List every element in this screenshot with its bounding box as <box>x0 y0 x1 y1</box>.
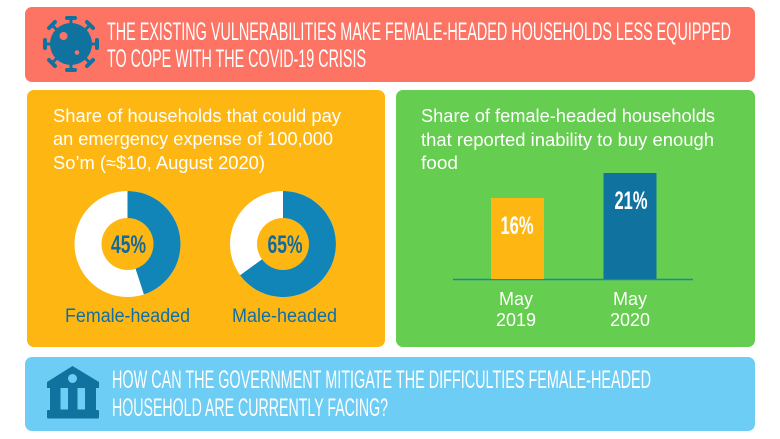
panel text <box>421 106 715 173</box>
panel text: Share of female-headed households <box>421 106 715 126</box>
panel: emergency expense <box>27 90 385 347</box>
axis label: May 2020: May <box>613 289 647 309</box>
axis label: May 2019: May <box>499 289 533 309</box>
bar chart <box>453 173 693 330</box>
label: male-headed: Male-headed <box>232 306 337 327</box>
label: female-headed: Female-headed <box>65 306 190 327</box>
panel text: Share of households that could pay <box>53 106 341 126</box>
footer banner <box>25 357 755 431</box>
footer text: HOUSEHOLD ARE CURRENTLY FACING? <box>112 394 388 422</box>
axis label: May 2019 <box>496 289 536 330</box>
donut: male-headed 65% <box>230 191 336 297</box>
panel text: So’m (≈$10, August 2020) <box>53 153 265 173</box>
axis label: May 2020 <box>610 289 650 330</box>
header text <box>107 18 731 73</box>
bar: May 2020: 21% <box>614 187 648 215</box>
panel text <box>53 106 341 173</box>
bar: May 2020 <box>604 173 656 279</box>
panel text: an emergency expense of 100,000 <box>53 129 333 149</box>
icon: government building <box>47 366 99 418</box>
footer text <box>112 366 651 422</box>
bar: May 2019: 16% <box>500 212 534 240</box>
icon: virus <box>45 18 97 70</box>
donut: female-headed 45%: 45% <box>111 231 146 259</box>
donut: male-headed 65%: 65% <box>268 231 302 259</box>
panel text: food <box>421 153 458 173</box>
panel text: that reported inability to buy enough <box>421 130 714 150</box>
header text: TO COPE WITH THE COVID-19 CRISIS <box>107 45 366 73</box>
donut: female-headed 45% <box>74 191 181 297</box>
bar: May 2019 <box>491 198 544 279</box>
panel: food insecurity <box>396 90 755 347</box>
header banner <box>25 7 755 82</box>
axis label: May 2020: 2020 <box>610 310 650 330</box>
axis label: May 2019: 2019 <box>496 310 536 330</box>
